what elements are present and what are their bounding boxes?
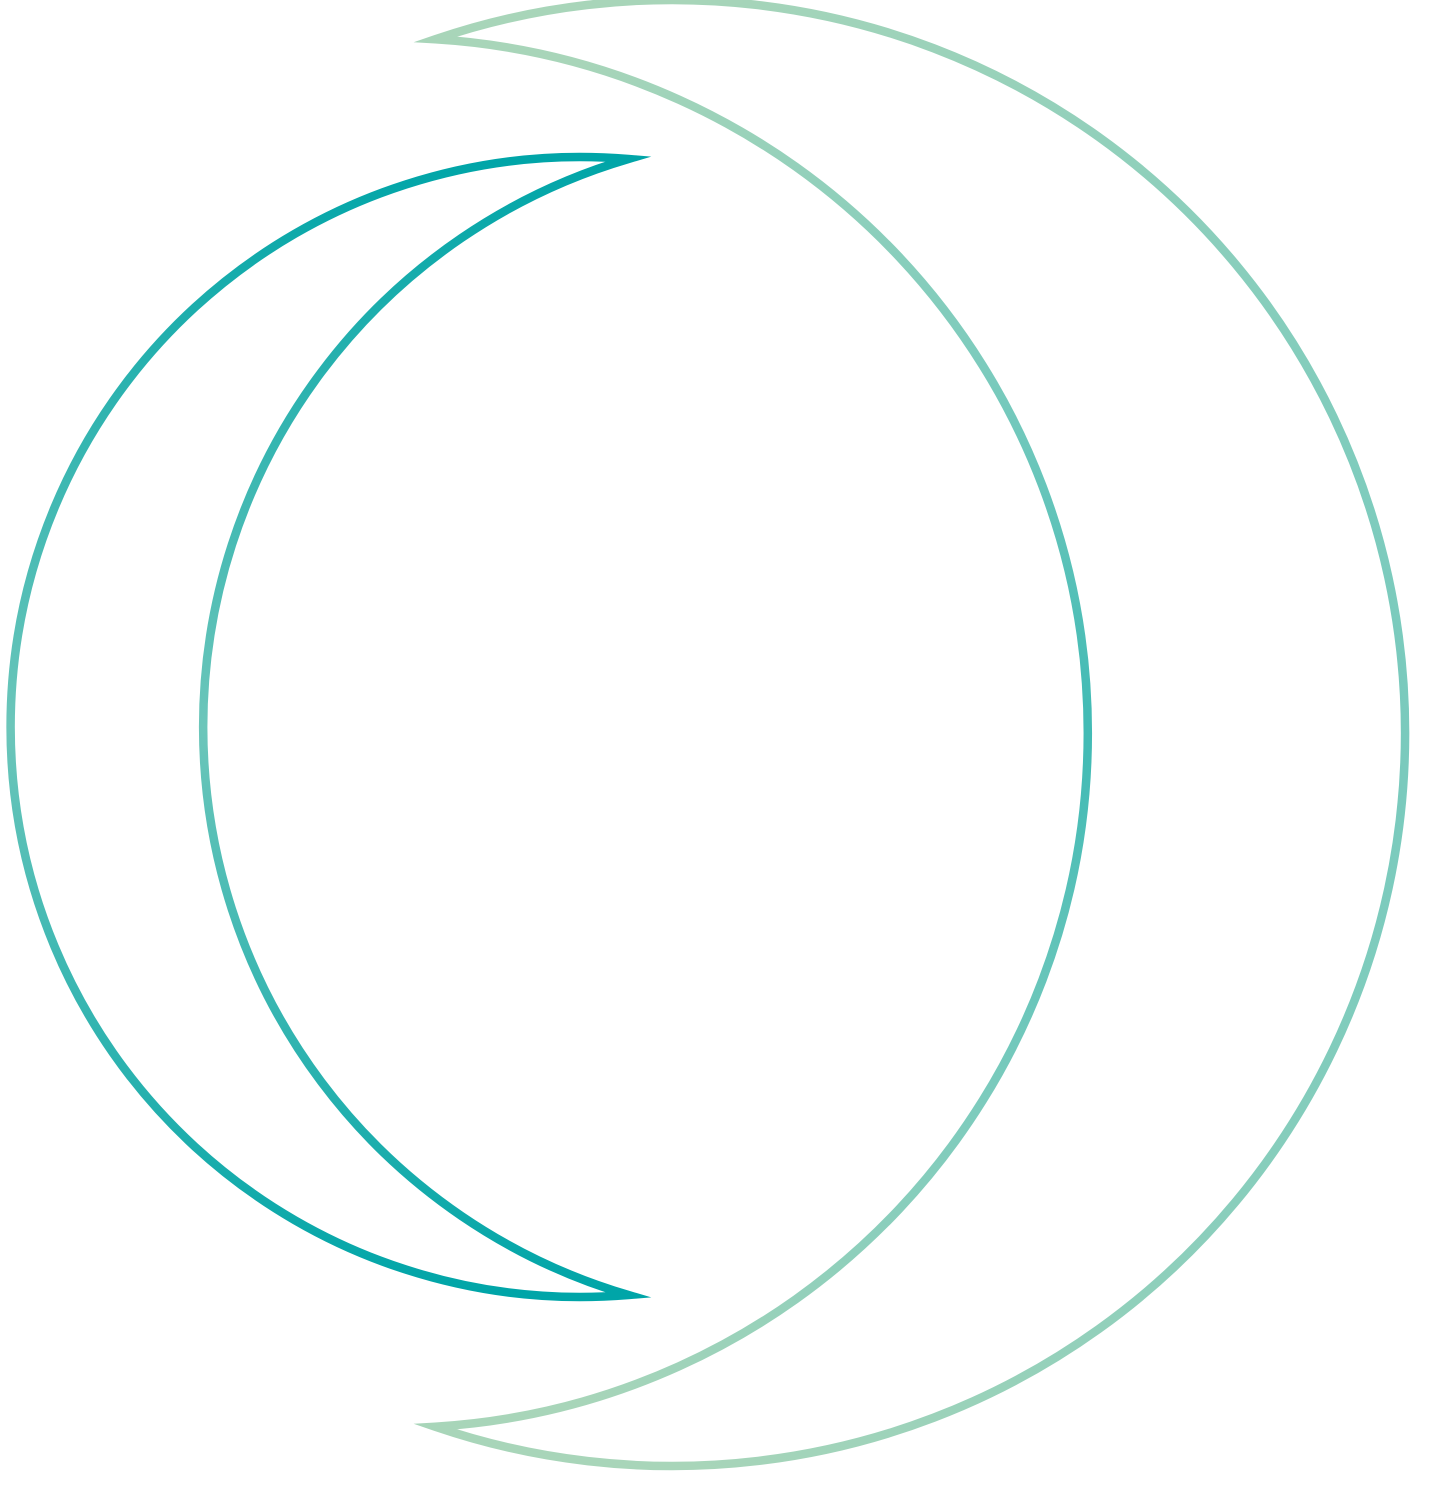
crescent: left teal — [11, 157, 628, 1297]
crescent: right large light — [435, 0, 1405, 1466]
